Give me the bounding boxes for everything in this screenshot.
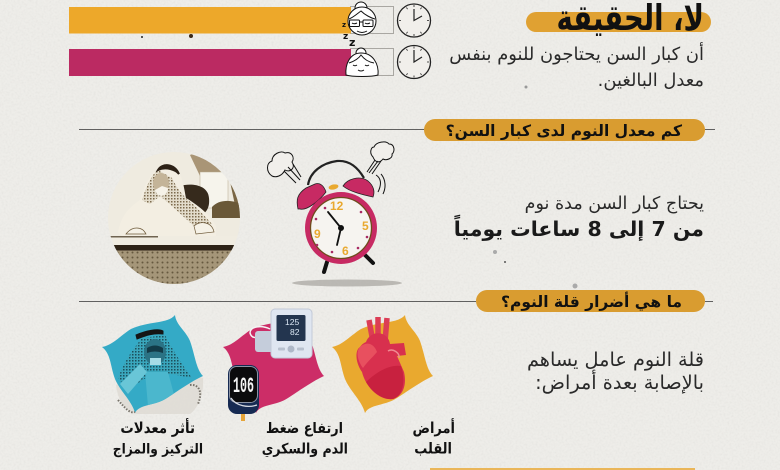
section heading: harms of sleep loss: ما هي أضرار قلة النوم؟ <box>501 292 682 312</box>
pillow: magenta <box>223 315 324 413</box>
steam puff left <box>268 152 301 183</box>
left bell <box>297 183 326 209</box>
icon: adult sleeping face <box>346 48 378 76</box>
bell knob <box>328 184 339 190</box>
elderly man <box>118 165 216 236</box>
text block: fact <box>449 42 704 91</box>
text block: sleep need: من 7 إلى 8 ساعات يومياً <box>454 214 704 241</box>
label: heart disease <box>412 418 455 458</box>
clock legs <box>324 254 373 272</box>
icon: heart <box>356 317 406 399</box>
text block: sleep need: يحتاج كبار السن مدة نوم <box>525 194 704 214</box>
label: concentration and mood: تأثر معدلات <box>120 418 195 437</box>
panel: concentration and mood <box>102 315 203 414</box>
man with headache <box>118 335 192 406</box>
clock shadow <box>292 280 402 286</box>
minute dots <box>315 207 368 253</box>
clock numerals: 9 <box>314 227 321 241</box>
text block: contributing factor: قلة النوم عامل يساهم <box>527 348 704 371</box>
label: heart disease: أمراض <box>412 418 455 437</box>
label: blood pressure and sugar: الدم والسكري <box>262 441 348 458</box>
icon: sleeping z letters: z <box>342 21 346 29</box>
icon: blood pressure monitor: 82 <box>290 327 300 337</box>
icon: angry alarm clock <box>268 142 402 286</box>
bar: older adults sleep <box>69 6 394 34</box>
agal headband <box>136 330 163 339</box>
text block: fact: أن كبار السن يحتاجون للنوم بنفس <box>449 42 704 65</box>
text block: sleep need <box>454 194 704 241</box>
panel: heart disease <box>332 315 433 413</box>
photo: elderly man asleep at desk <box>106 152 246 286</box>
section heading: average sleep <box>79 119 715 141</box>
icon: clock top <box>398 4 430 37</box>
clock hands <box>328 212 344 245</box>
chair back <box>184 184 210 212</box>
panel: blood pressure and sugar <box>223 309 324 421</box>
clock body <box>305 192 377 264</box>
text block: contributing factor <box>527 348 704 394</box>
desk <box>110 236 234 284</box>
clock numerals: 6 <box>342 244 349 258</box>
icon: sleeping z letters: z <box>349 36 355 49</box>
section heading: average sleep: كم معدل النوم لدى كبار السن؟ <box>446 122 683 140</box>
icon: glucose meter: 106 <box>233 374 254 399</box>
pillow: blue <box>102 315 203 413</box>
label: concentration and mood: التركيز والمزاج <box>113 442 203 458</box>
text block: fact: معدل البالغين. <box>598 70 704 91</box>
text block: contributing factor: بالإصابة بعدة أمراض: <box>535 370 704 394</box>
right bell <box>343 178 374 197</box>
pillow: yellow <box>332 315 433 413</box>
label: blood pressure and sugar <box>262 420 348 458</box>
man body below pillow <box>116 374 203 414</box>
section heading: harms of sleep loss <box>79 290 713 312</box>
clock numerals: 5 <box>362 219 369 233</box>
steam puff right <box>367 142 394 194</box>
icon: blood pressure monitor: 125 <box>285 317 299 327</box>
icon: sleeping z letters: z <box>343 32 348 42</box>
icon: blood pressure monitor <box>250 309 312 358</box>
icon: grandmother with glasses <box>348 2 376 35</box>
label: heart disease: القلب <box>414 441 452 458</box>
man sleeve texture <box>118 385 200 412</box>
chart: sleep bars comparison <box>69 2 430 78</box>
clock handle <box>308 161 364 185</box>
clock numerals: 12 <box>330 199 344 213</box>
icon: clock bottom <box>398 46 430 78</box>
shelf and background decor <box>190 154 240 218</box>
clock numerals <box>314 199 369 258</box>
label: concentration and mood <box>113 418 203 458</box>
bar: adults sleep <box>69 48 394 76</box>
icon: sleeping z letters <box>342 21 355 49</box>
bottom next section pill edge <box>430 468 695 470</box>
label: blood pressure and sugar: ارتفاع ضغط <box>266 420 343 437</box>
